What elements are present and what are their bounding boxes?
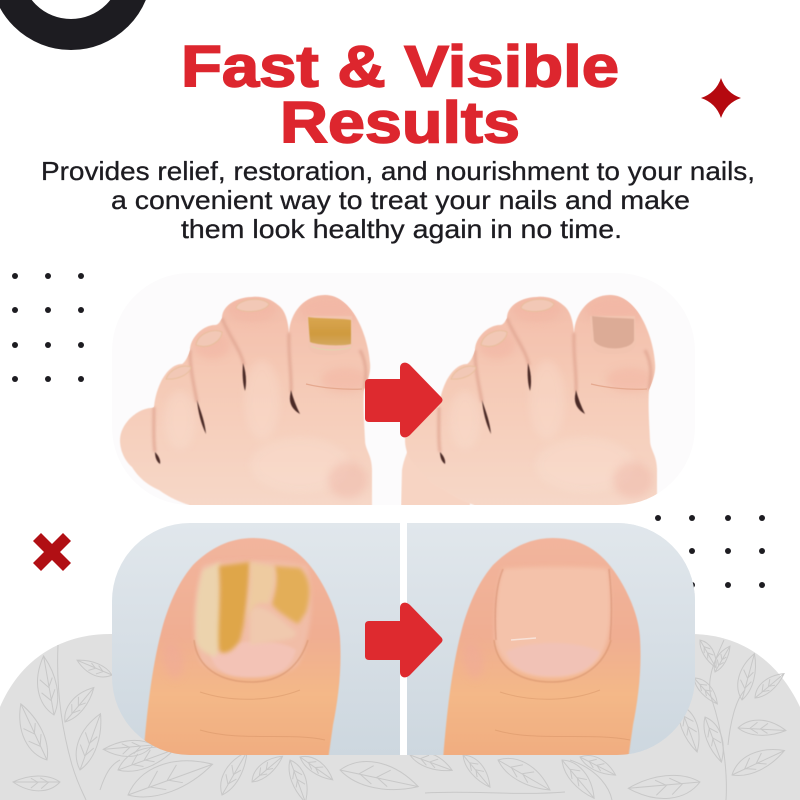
title: Fast & Visible — [181, 34, 619, 100]
panel: thumbnail before and after — [112, 523, 695, 760]
before thumb — [143, 538, 341, 760]
description text: Provides relief, restoration, and nourishment to your nails, — [41, 156, 755, 186]
arrow: top — [365, 363, 442, 437]
black ring — [6, 0, 136, 34]
description text: a convenient way to treat your nails and make — [111, 185, 690, 215]
icon: red cross — [33, 533, 71, 571]
dot grid left — [12, 273, 84, 382]
description text — [41, 156, 755, 244]
before foot — [120, 295, 372, 510]
icon: red sparkle — [701, 78, 741, 118]
leaf background panel — [0, 634, 800, 800]
title: Results — [280, 90, 520, 156]
panel: toes before and after — [120, 294, 658, 505]
after foot — [401, 295, 657, 510]
dot grid right — [655, 515, 765, 588]
title — [181, 34, 619, 156]
arrow: bottom — [365, 603, 442, 677]
divider — [400, 523, 407, 755]
after thumb — [443, 538, 641, 760]
description text: them look healthy again in no time. — [181, 214, 622, 244]
